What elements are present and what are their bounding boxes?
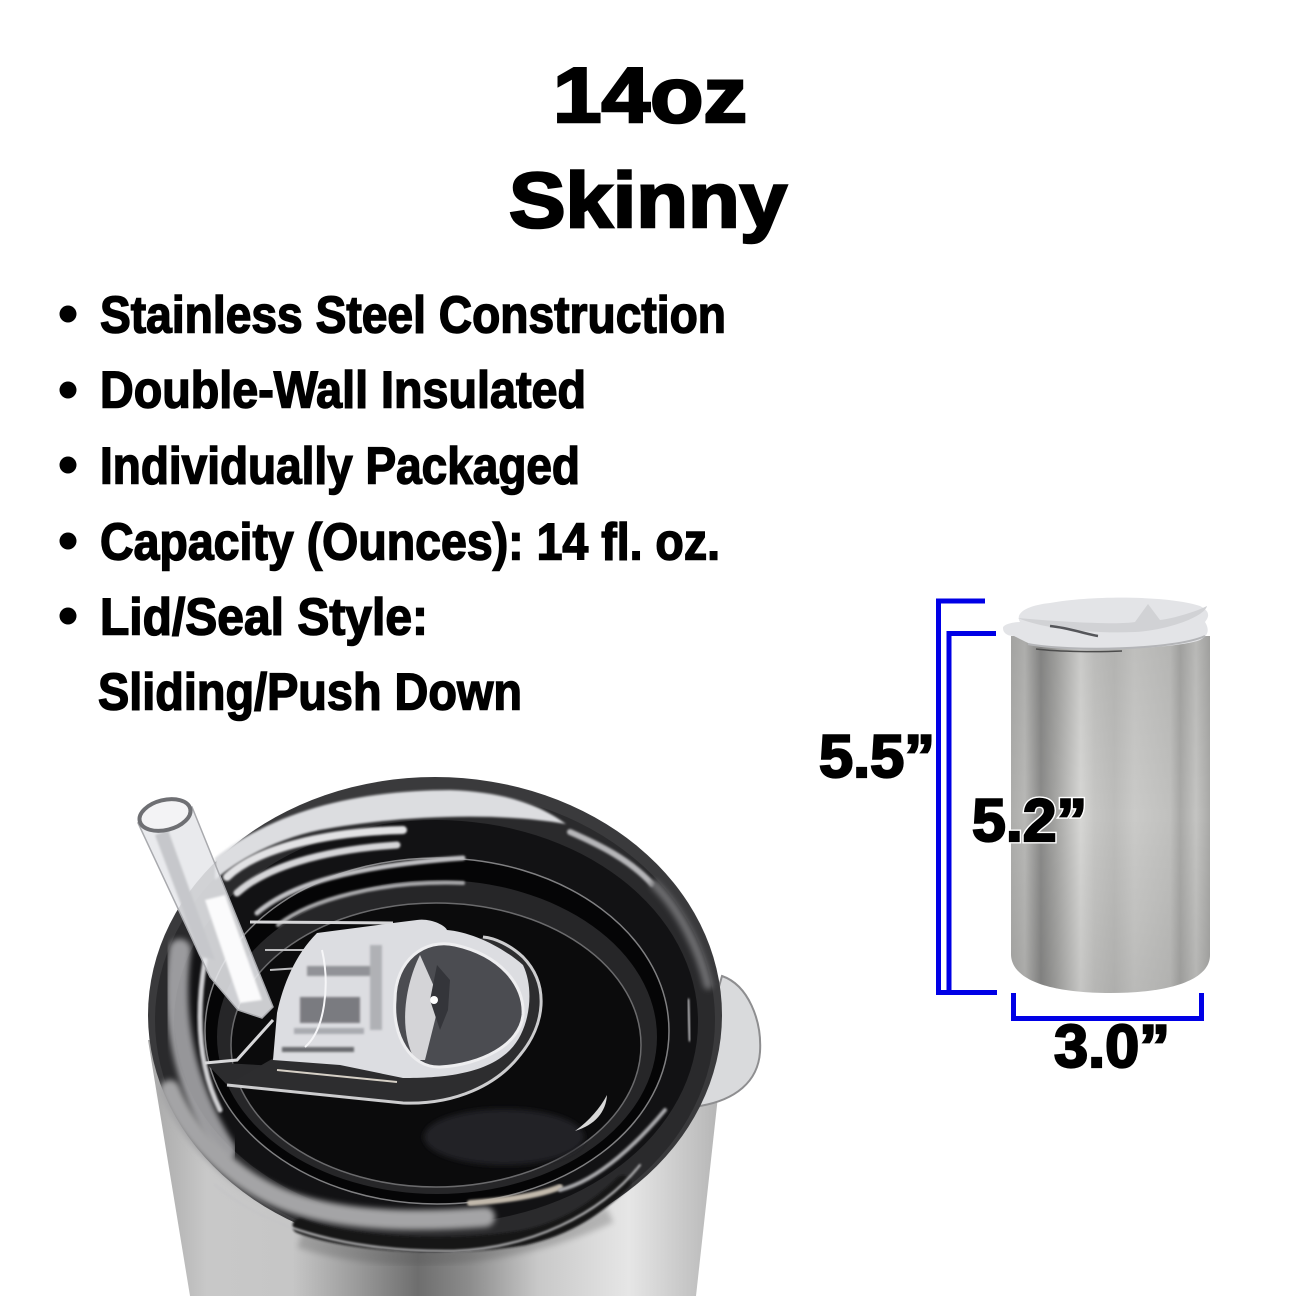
lid outer rim xyxy=(148,777,722,1253)
dimension bracket: 5.2 inch xyxy=(949,634,996,992)
title xyxy=(509,51,787,244)
tumbler lid xyxy=(1003,598,1208,652)
title: 14oz xyxy=(553,51,747,139)
bullet: packaged: Individually Packaged xyxy=(100,438,580,496)
photo: tumbler lid close-up xyxy=(136,777,760,1296)
lid rings xyxy=(155,790,715,1250)
bullet: lid style xyxy=(60,588,522,722)
bullet: lid style: Lid/Seal Style: xyxy=(100,588,428,646)
bullet: stainless steel: Stainless Steel Construction xyxy=(100,286,726,344)
photo: full tumbler xyxy=(1003,598,1210,993)
feature list xyxy=(60,286,726,722)
top rim highlight xyxy=(215,790,566,880)
lid centre disc xyxy=(231,903,641,1187)
slider button xyxy=(273,920,529,1078)
label: 5.2 inch: 5.2” xyxy=(972,787,1087,854)
dimension bracket: 3.0 inch xyxy=(1014,993,1202,1018)
title: Skinny xyxy=(509,156,787,244)
label: 5.2 inch: 5.2” xyxy=(972,787,1087,854)
side tab xyxy=(690,976,760,1106)
bullet: lid style: Sliding/Push Down xyxy=(98,664,522,722)
dimension bracket: 5.5 inch xyxy=(938,601,997,992)
tumbler body xyxy=(1011,636,1210,993)
label: 5.5 inch: 5.5” xyxy=(819,723,935,790)
bullet: double-wall: Double-Wall Insulated xyxy=(100,362,586,420)
tumbler body xyxy=(148,1040,722,1296)
glare arcs xyxy=(170,830,708,1251)
bullet: capacity: Capacity (Ounces): 14 fl. oz. xyxy=(100,514,720,572)
straw xyxy=(136,794,273,1018)
slider track xyxy=(205,922,541,1103)
label: 3.0 inch: 3.0” xyxy=(1054,1013,1170,1080)
